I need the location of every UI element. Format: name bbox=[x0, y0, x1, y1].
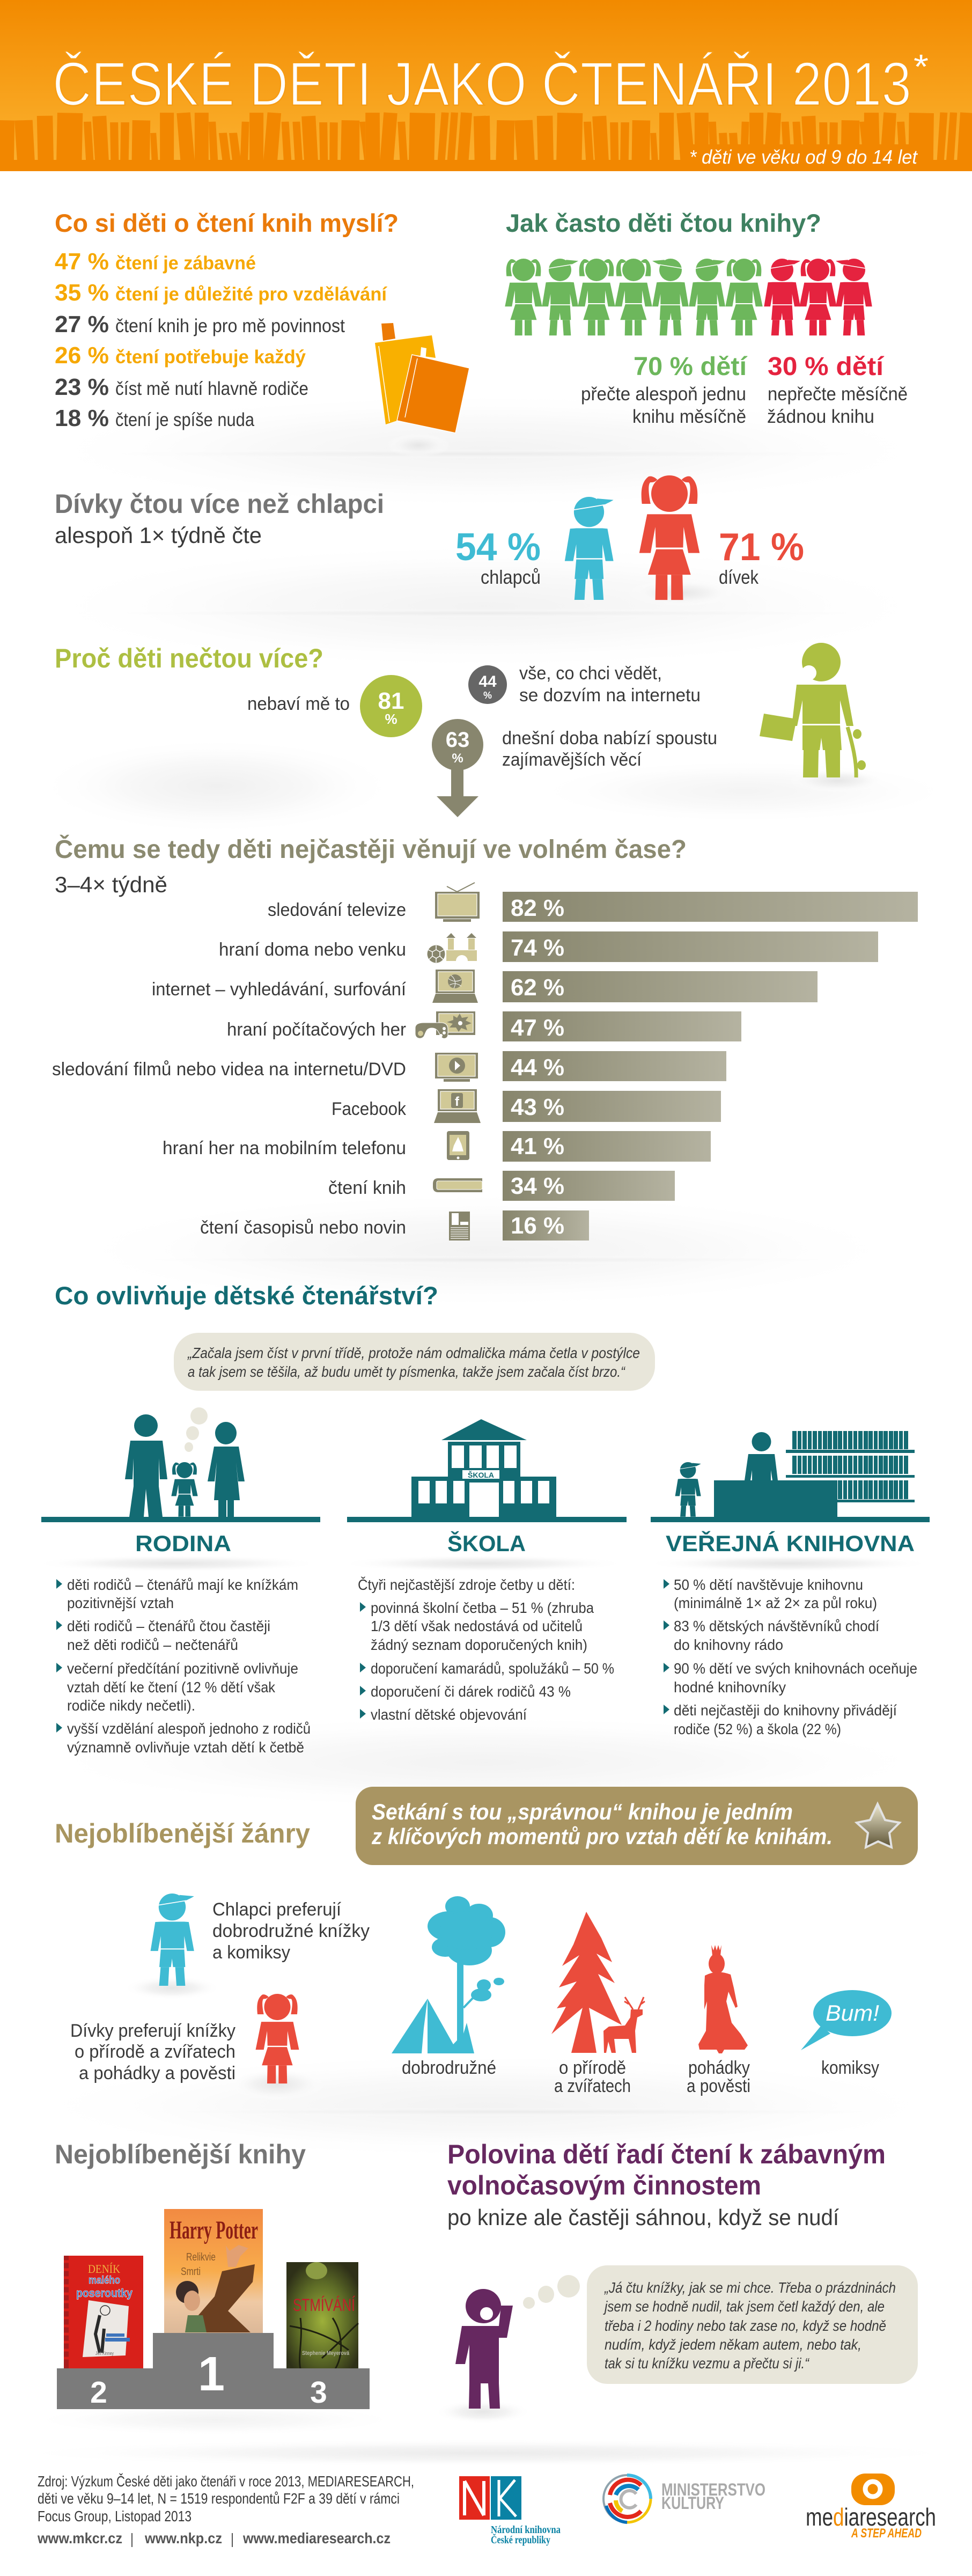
stat: 70 percent bbox=[581, 353, 748, 427]
age note: * děti ve věku od 9 do 14 let bbox=[689, 146, 918, 168]
panel: why children don't read more bbox=[55, 643, 866, 817]
reason: 81 percent: 81 bbox=[378, 688, 404, 714]
bullet list: (minimálně 1× až 2× za půl roku) bbox=[674, 1595, 877, 1611]
row: television bbox=[268, 883, 918, 922]
bullet list bbox=[56, 1576, 311, 1756]
logo: mediaresearch: A STEP AHEAD bbox=[851, 2526, 922, 2541]
reason: 63 percent bbox=[432, 719, 717, 770]
panel: free time activities bbox=[52, 834, 918, 1241]
row: mobile games: 41 % bbox=[511, 1133, 564, 1159]
heading: Co ovlivňuje dětské čtenářství? bbox=[55, 1281, 438, 1310]
stat: 30 percent: nepřečte měsíčně bbox=[768, 384, 908, 405]
reason: 81 percent bbox=[247, 675, 422, 737]
icon: game controller and screen bbox=[415, 1011, 475, 1038]
boys preference bbox=[151, 1894, 370, 1986]
row: internet: internet – vyhledávání, surfování bbox=[152, 979, 407, 1000]
opinion rows: čtení je spíše nuda bbox=[115, 409, 254, 430]
genre: nature and animals bbox=[551, 1912, 645, 2096]
website links: www.mediaresearch.cz bbox=[242, 2530, 391, 2546]
genre: adventure: dobrodružné bbox=[402, 2058, 496, 2078]
row: computer games: hraní počítačových her bbox=[227, 1019, 406, 1040]
heading: Proč děti nečtou více? bbox=[55, 643, 323, 673]
icon: girl bbox=[639, 475, 699, 600]
opinion rows: čtení knih je pro mě povinnost bbox=[115, 315, 345, 336]
quote bubble: „Začala jsem číst v první třídě, protože nám odmalička máma četla v postýlce bbox=[187, 1345, 640, 1361]
opinion rows: číst mě nutí hlavně rodiče bbox=[115, 378, 308, 399]
book cover: Deník malého poseroutky: malého bbox=[89, 2274, 120, 2286]
icon: pine tree and deer bbox=[551, 1912, 645, 2053]
row: computer games: 47 % bbox=[511, 1015, 564, 1041]
panel: what influences reading bbox=[41, 1281, 930, 1756]
reason: 44 percent: vše, co chci vědět, bbox=[519, 663, 662, 684]
bullet list: než děti rodičů – nečtenářů bbox=[67, 1636, 238, 1653]
icon: books bbox=[375, 323, 469, 433]
girls preference bbox=[70, 1994, 299, 2083]
bullet list: rodiče nikdy nečetli). bbox=[67, 1697, 195, 1714]
row: reading books: 34 % bbox=[511, 1173, 564, 1199]
genre: nature and animals: o přírodě bbox=[559, 2058, 626, 2078]
website links: www.nkp.cz bbox=[144, 2530, 222, 2546]
genre: nature and animals: a zvířatech bbox=[554, 2076, 631, 2096]
icon: thinking child bbox=[455, 2275, 580, 2409]
bullet list: vyšší vzdělání alespoň jednoho z rodičů bbox=[67, 1720, 311, 1737]
book cover: Harry Potter: Harry Potter bbox=[170, 2216, 258, 2244]
header banner bbox=[0, 0, 972, 171]
stat: 30 percent: 30 % dětí bbox=[768, 353, 885, 381]
icon: princess bbox=[698, 1945, 748, 2053]
book cover: Stmívání: STMÍVÁNÍ bbox=[293, 2295, 355, 2315]
row: television: 82 % bbox=[511, 895, 564, 921]
icon: ball and toy castle bbox=[427, 933, 477, 963]
stat: boys: 54 % bbox=[455, 526, 541, 569]
panel: half of children rank reading as fun bbox=[447, 2139, 918, 2409]
genre: comics: komiksy bbox=[821, 2058, 879, 2078]
quote bubble: tak si tu knížku vezmu a přečtu si ji.“ bbox=[605, 2355, 809, 2372]
row: internet bbox=[152, 970, 818, 1003]
column title: ŠKOLA bbox=[447, 1530, 526, 1556]
bullet list: děti rodičů – čtenářů mají ke knížkám bbox=[67, 1576, 298, 1593]
logo: mediaresearch: mediaresearch bbox=[806, 2503, 936, 2531]
book silhouettes right bbox=[486, 112, 972, 171]
bullet list: 50 % dětí navštěvuje knihovnu bbox=[674, 1576, 863, 1593]
genre: fairy tales: a pověsti bbox=[687, 2076, 750, 2096]
row: films and video: 44 % bbox=[511, 1054, 564, 1081]
heading: Co si děti o čtení knih myslí? bbox=[55, 209, 399, 237]
icon: tent and tree bbox=[392, 1896, 505, 2053]
icon: closed book bbox=[433, 1178, 482, 1192]
icon: school building: ŠKOLA bbox=[468, 1470, 494, 1479]
genre: adventure bbox=[392, 1896, 505, 2078]
row: films and video bbox=[52, 1051, 726, 1082]
icon: bored child with book bbox=[760, 643, 866, 777]
stat: boys: chlapců bbox=[481, 566, 541, 588]
heading: Jak často děti čtou knihy? bbox=[506, 209, 821, 237]
bullet list bbox=[358, 1576, 614, 1723]
bullet list: večerní předčítání pozitivně ovlivňuje bbox=[67, 1660, 298, 1677]
reason: 44 percent: 44 bbox=[478, 673, 497, 691]
stat: 70 percent: 70 % dětí bbox=[634, 353, 748, 381]
stat: 70 percent: knihu měsíčně bbox=[632, 406, 746, 427]
subheading: po knize ale častěji sáhnou, když se nudí bbox=[447, 2205, 839, 2230]
boys preference: a komiksy bbox=[212, 1942, 290, 1963]
podium: 2 bbox=[90, 2375, 107, 2410]
row: mobile games bbox=[163, 1131, 711, 1162]
callout: Setkání s tou „správnou“ knihou je jedním bbox=[372, 1799, 793, 1824]
icon: star bbox=[857, 1804, 900, 1847]
book cover: Stmívání: Stephenie Meyerová bbox=[302, 2350, 350, 2357]
bullet list: 83 % dětských návštěvníků chodí bbox=[674, 1618, 879, 1634]
row: films and video: sledování filmů nebo videa na internetu/DVD bbox=[52, 1059, 406, 1080]
row: magazines bbox=[200, 1210, 589, 1241]
panel: favourite books bbox=[55, 2139, 370, 2410]
girls preference: Dívky preferují knížky bbox=[70, 2021, 235, 2041]
icon: boy bbox=[565, 497, 614, 600]
title asterisk: * bbox=[914, 47, 929, 86]
row: mobile games: hraní her na mobilním telefonu bbox=[163, 1138, 406, 1158]
subheading: 3–4× týdně bbox=[55, 872, 167, 897]
bullet list bbox=[664, 1576, 917, 1737]
arrow bbox=[437, 745, 478, 817]
column title: RODINA bbox=[135, 1531, 231, 1556]
stat: girls bbox=[719, 526, 804, 588]
panel: how often children read bbox=[505, 209, 908, 427]
icon: speech bubble bbox=[801, 1990, 892, 2050]
podium: 1 bbox=[198, 2347, 225, 2401]
reason: 81 percent: % bbox=[385, 711, 397, 727]
icon: laptop with Facebook logo: f bbox=[455, 1095, 460, 1109]
bullet list: hodné knihovníky bbox=[674, 1679, 786, 1696]
podium: 3 bbox=[310, 2375, 327, 2410]
row: reading books bbox=[328, 1171, 675, 1201]
book cover: Stmívání bbox=[286, 2262, 358, 2369]
quote bubble bbox=[174, 1333, 655, 1391]
genre: fairy tales bbox=[687, 1945, 750, 2096]
stat: 30 percent bbox=[767, 353, 908, 427]
logo: Ministerstvo kultury: KULTURY bbox=[661, 2493, 724, 2513]
row: computer games bbox=[227, 1011, 741, 1041]
girls preference: o přírodě a zvířatech bbox=[75, 2042, 235, 2062]
row: internet: 62 % bbox=[511, 974, 564, 1001]
panel: what children think bbox=[55, 209, 469, 433]
genre: comics bbox=[801, 1990, 892, 2078]
opinion rows: čtení je důležité pro vzdělávání bbox=[115, 284, 387, 305]
bullet list: žádný seznam doporučených knih) bbox=[371, 1636, 587, 1653]
bullet list: 90 % dětí ve svých knihovnách oceňuje bbox=[674, 1660, 917, 1677]
website links bbox=[37, 2530, 391, 2547]
opinion rows: 35 % bbox=[55, 280, 109, 306]
reason: 63 percent: % bbox=[452, 751, 463, 766]
stat: 30 percent: žádnou knihu bbox=[767, 406, 874, 427]
heading: Nejoblíbenější žánry bbox=[55, 1818, 310, 1848]
pictogram: children bbox=[505, 259, 872, 335]
row: television: sledování televize bbox=[268, 900, 406, 920]
heading: Nejoblíbenější knihy bbox=[55, 2139, 306, 2169]
book silhouettes left bbox=[0, 112, 486, 171]
book cover: Deník malého poseroutky: Jeff Kinney bbox=[95, 2351, 114, 2356]
book cover: Deník malého poseroutky: poseroutky bbox=[76, 2286, 133, 2300]
heading bbox=[447, 2139, 886, 2200]
row: play: hraní doma nebo venku bbox=[219, 940, 406, 960]
quote bubble bbox=[587, 2265, 918, 2384]
bullet list: významně ovlivňuje vztah dětí k četbě bbox=[67, 1739, 304, 1756]
source text: Focus Group, Listopad 2013 bbox=[38, 2508, 192, 2524]
bullet list: rodiče (52 %) a škola (22 %) bbox=[674, 1721, 841, 1737]
quote bubble: třeba i 2 hodiny nebo tak zase no, když se hodně bbox=[605, 2317, 886, 2334]
genre: fairy tales: pohádky bbox=[688, 2058, 750, 2078]
opinion rows: 26 % bbox=[55, 342, 109, 369]
heading: Dívky čtou více než chlapci bbox=[55, 489, 384, 519]
bullet list: vlastní dětské objevování bbox=[371, 1706, 527, 1723]
website links: www.mkcr.cz bbox=[37, 2530, 122, 2546]
footer bbox=[37, 2473, 936, 2547]
book cover: Deník malého poseroutky bbox=[64, 2256, 143, 2368]
logo: mediaresearch bbox=[806, 2474, 936, 2541]
callout: z klíčových momentů pro vztah dětí ke knihám. bbox=[371, 1824, 833, 1849]
source text: děti ve věku 9–14 let, N = 1519 respondentů F2F a 39 dětí v rámci bbox=[38, 2490, 400, 2507]
reason: 81 percent: nebaví mě to bbox=[247, 694, 350, 714]
quote bubble: a tak jsem se těšila, až budu umět ty písmenka, takže jsem začala číst brzo.“ bbox=[188, 1363, 625, 1380]
bullet list: vztah dětí ke čtení (12 % dětí však bbox=[67, 1679, 276, 1696]
stat: boys bbox=[455, 526, 541, 588]
opinion rows: 23 % bbox=[55, 374, 109, 400]
row: Facebook: Facebook bbox=[332, 1099, 407, 1119]
reason: 63 percent: zajímavějších věcí bbox=[502, 750, 642, 770]
row: magazines: čtení časopisů nebo novin bbox=[200, 1217, 406, 1238]
bullet list: doporučení či dárek rodičů 43 % bbox=[371, 1683, 571, 1700]
row: Facebook: 43 % bbox=[511, 1094, 564, 1120]
icon: television bbox=[435, 883, 480, 922]
bullet list: doporučení kamarádů, spolužáků – 50 % bbox=[371, 1660, 614, 1677]
reason: 44 percent: se dozvím na internetu bbox=[519, 685, 701, 706]
heading: Čemu se tedy děti nejčastěji věnují ve volném čase? bbox=[55, 834, 687, 864]
bullet list: povinná školní četba – 51 % (zhruba bbox=[371, 1599, 594, 1616]
row: play bbox=[219, 931, 878, 963]
logo: Ministerstvo kultury bbox=[603, 2475, 765, 2522]
icon: mobile phone bbox=[447, 1131, 469, 1160]
logo: Národní knihovna: České republiky bbox=[491, 2533, 550, 2546]
book cover: Deník malého poseroutky: DENÍK bbox=[88, 2262, 120, 2276]
podium bbox=[57, 2333, 370, 2410]
heading: volnočasovým činnostem bbox=[447, 2170, 761, 2200]
opinion rows: čtení je zábavné bbox=[115, 253, 256, 274]
bullet list: Čtyři nejčastější zdroje četby u dětí: bbox=[358, 1576, 575, 1593]
heading: Polovina dětí řadí čtení k zábavným bbox=[447, 2139, 886, 2169]
panel: favourite genres bbox=[55, 1787, 918, 2096]
quote bubble: jsem se hodně nudil, tak jsem četl každý den, ale bbox=[603, 2298, 885, 2315]
icon: library bbox=[651, 1431, 930, 1522]
callout bbox=[356, 1787, 918, 1865]
subheading: alespoň 1× týdně čte bbox=[55, 523, 262, 548]
opinion rows: čtení potřebuje každý bbox=[115, 347, 306, 368]
opinion rows bbox=[55, 248, 387, 431]
icon: monitor with play button bbox=[435, 1053, 478, 1082]
source text bbox=[38, 2473, 414, 2524]
stat: 70 percent: přečte alespoň jednu bbox=[581, 384, 746, 405]
column: school bbox=[347, 1419, 627, 1723]
panel: girls read more bbox=[55, 475, 804, 600]
logo: Ministerstvo kultury: MINISTERSTVO bbox=[661, 2480, 765, 2499]
icon: laptop with Facebook logo bbox=[434, 1089, 481, 1123]
reason: 63 percent: dnešní doba nabízí spoustu bbox=[502, 728, 717, 748]
logo: Národní knihovna: Národní knihovna bbox=[491, 2524, 561, 2536]
stat: girls: dívek bbox=[719, 566, 759, 588]
book cover: Harry Potter: Smrti bbox=[181, 2266, 201, 2278]
logo: Národní knihovna bbox=[459, 2476, 561, 2546]
opinion rows: 47 % bbox=[55, 248, 109, 275]
quote bubble: „Já čtu knížky, jak se mi chce. Třeba o prázdninách bbox=[604, 2279, 896, 2296]
row: Facebook bbox=[332, 1089, 721, 1123]
boys preference: dobrodružné knížky bbox=[212, 1921, 370, 1941]
girls preference: a pohádky a pověsti bbox=[79, 2063, 235, 2083]
bullet list: do knihovny rádo bbox=[674, 1636, 783, 1653]
icon: laptop with globe bbox=[432, 970, 478, 1003]
column: public library bbox=[651, 1431, 930, 1737]
column: family bbox=[41, 1407, 320, 1756]
stat: girls: 71 % bbox=[719, 526, 804, 569]
icon: newspaper bbox=[449, 1212, 470, 1241]
reason: 44 percent bbox=[468, 663, 701, 706]
row: reading books: čtení knih bbox=[328, 1178, 406, 1198]
book cover: Harry Potter bbox=[164, 2209, 263, 2333]
reason: 44 percent: % bbox=[483, 690, 492, 701]
row: magazines: 16 % bbox=[511, 1213, 564, 1239]
bullet list: děti rodičů – čtenářů čtou častěji bbox=[67, 1618, 270, 1634]
book cover: Harry Potter: Relikvie bbox=[186, 2251, 216, 2263]
opinion rows: 18 % bbox=[55, 405, 109, 431]
source text: Zdroj: Výzkum České děti jako čtenáři v roce 2013, MEDIARESEARCH, bbox=[38, 2473, 414, 2490]
icon: speech bubble: Bum! bbox=[826, 2000, 879, 2025]
column title: VEŘEJNÁ KNIHOVNA bbox=[666, 1530, 915, 1556]
reason: 63 percent: 63 bbox=[446, 728, 469, 752]
bullet list: pozitivnější vztah bbox=[67, 1595, 174, 1611]
opinion rows: 27 % bbox=[55, 311, 109, 337]
icon: family bbox=[41, 1407, 320, 1522]
quote bubble: nudím, když jedem někam autem, nebo tak, bbox=[605, 2336, 861, 2353]
bullet list: 1/3 dětí však nedostává od učitelů bbox=[371, 1618, 583, 1634]
icon: school building bbox=[347, 1419, 627, 1522]
boys preference: Chlapci preferují bbox=[212, 1899, 342, 1920]
bullet list: děti nejčastěji do knihovny přivádějí bbox=[674, 1702, 897, 1719]
row: play: 74 % bbox=[511, 935, 564, 961]
